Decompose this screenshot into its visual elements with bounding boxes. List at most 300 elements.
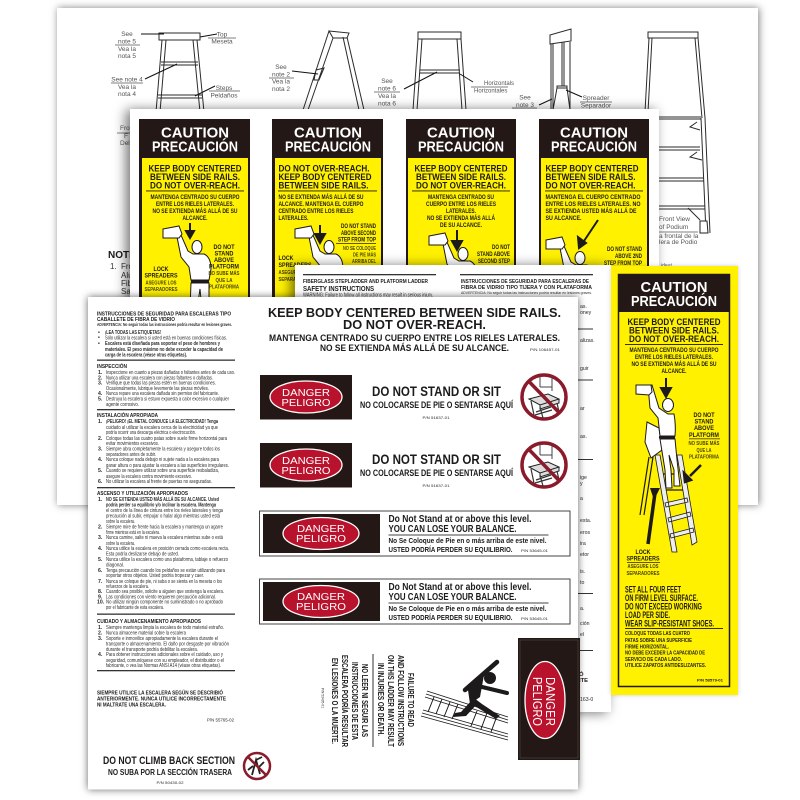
heading bar: caution precaución [618,274,730,312]
label: do not stand or sit (second): DO NOT STAND OR SIT [372,452,502,467]
text block: Spanish stepladder safety instructions: 6. [98,479,103,485]
text block: Spanish stepladder safety instructions: Nunca repare una escalera dañada sin permiso del fabricante. [106,391,219,397]
text block: right column fragments: a. [580,606,584,612]
label: caution 3 [406,119,516,316]
label: failure to read warning (rotated): ON THIS LADDER MAY RESULT [386,655,396,748]
label: caution 1: SPREADERS [144,274,178,280]
text block: set all four feet: PATAS SOBRE UNA SUPERFICIE [625,638,692,644]
label: do not stand or sit (second) [260,443,566,488]
label: caution 4: DO NOT OVER-REACH. [546,180,636,190]
panel: fiberglass ladder safety instructions sheet [295,265,611,712]
callout: lock spreaders: LOCK [636,550,651,556]
label: caution 1: ALCANCE. [182,215,208,222]
label: caution 4: CAUTION [560,124,628,142]
callout: do not stand above platform: ABOVE [694,426,714,432]
label: caution 3: LATERALES. [446,208,476,215]
label: do not stand at or above this level (second): No Se Coloque de Pie en o más arriba de este nivel. [388,604,546,613]
callout: lock spreaders: ASEGURE LOS [628,564,659,570]
text block: Spanish stepladder safety instructions: durante el transporte podría debilitar la escalera. [106,647,198,653]
label: do not stand at or above this level (second): P/N 53645-01 [521,617,548,621]
label: failure to read warning (rotated): NO LEER NI SEGUIR LAS [360,664,370,737]
diagram: side view of stepladder [269,31,364,110]
text block: Spanish stepladder safety instructions: 8. [98,589,103,595]
text block: Spanish stepladder safety instructions: Cuando se requiere utilizar sobre una superficie resbaladiza, [106,468,219,474]
text block: notes: 1. [110,262,117,271]
label: caution 2: CAUTION [294,124,362,142]
panel: large yellow caution label [611,266,738,695]
label: caution 1: SEPARADORES [144,287,178,293]
text block: Spanish stepladder safety instructions: carga de la escalera (véase otras etiquetas). [105,352,187,358]
text block: Spanish stepladder safety instructions: por el fabricante de esta escalera. [106,605,164,611]
diagram: rear view of stepladder: Horizontales [474,88,507,94]
label: do not stand at or above this level (second): YOU CAN LOSE YOUR BALANCE. [388,592,517,603]
text block: Spanish stepladder safety instructions: ganar altura o para ajustar la escalera a las superficies irregulares. [106,463,229,469]
diagram: front view of stepladder with labels [111,31,240,112]
text block: Spanish stepladder safety instructions: SIEMPRE UTILICE LA ESCALERA SEGÚN SE DESCRIBIÓ [97,688,223,696]
label: failure to read warning (rotated): EN LESIONES O LA MUERTE. [330,658,340,744]
text block: Spanish stepladder safety instructions: 3. [98,535,103,541]
text block: keep body centered: ALCANCE. [662,368,687,375]
diagram: rear view of stepladder: Vea la [378,93,396,100]
label: caution 3: DE SU ALCANCE. [440,222,482,229]
label: caution 3: DO NOT [492,245,510,251]
text block: Spanish stepladder safety instructions: 4. [98,457,103,463]
label: caution 2: SPREADERS [278,263,312,269]
text block: Spanish stepladder safety instructions: evitar movimientos excesivos. [106,441,159,447]
text block: keep body centered: BETWEEN SIDE RAILS. [629,326,719,336]
label: caution 4: MANTENGA EL CUERPO CENTRADO [546,194,641,201]
diagram: front view of stepladder with labels: See [121,31,133,38]
label: keep body centered banner: DO NOT OVER-REACH. [343,318,486,332]
text block: Spanish stepladder safety instructions: Soporte e inmovilice apropiadamente la escalera durante el [106,636,218,642]
label: caution 1: QUE LA [216,278,232,284]
label: do not stand at or above this level (second): DANGER [297,591,345,603]
text block: right column fragments: el [580,632,584,638]
label: keep body centered banner [268,306,561,354]
text block: Spanish stepladder safety instructions: Nunca almacene material sobre la escalera [106,630,186,636]
text block: set all four feet: UTILICE ZAPATOS ANTIDESLIZANTES. [625,663,706,669]
text block: Spanish stepladder safety instructions: ADVERTENCIA: No seguir todas las instrucciones podría resultar en lesiones graves. [97,322,232,327]
text block: Spanish stepladder safety instructions: 2. [98,524,103,530]
text block: set all four feet: SET ALL FOUR FEET [625,584,681,594]
label: caution 2: PRECAUCIÓN [285,138,371,156]
text block: Spanish stepladder safety instructions: 9. [98,594,103,600]
text block: Spanish stepladder safety instructions: Ocasionalmente, lubrique levemente las piezas móviles. [106,386,209,392]
label: caution 1: ENTRE LOS RIELES LATERALES. [156,201,234,208]
text block: Spanish stepladder safety instructions: 4. [98,546,103,552]
text block: set all four feet: LOAD PER SIDE. [625,610,670,620]
text block: right column fragments: Ó [579,670,584,678]
icon: no climbing back section [244,753,270,779]
label: caution 3: CUERPO ENTRE LOS RIELES [426,201,496,208]
label: caution 1: DO NOT OVER-REACH. [150,180,240,190]
label: caution 2 [272,119,383,309]
text block: Spanish stepladder safety instructions: NO SE EXTIENDA USTED MÁS ALLÁ DE SU ALCANCE. Usted [106,496,219,503]
text block: Spanish stepladder safety instructions: asegure la escalera contra movimiento excesivo. [106,474,192,480]
label: do not stand at or above this level (first): DANGER [297,523,345,535]
text block: Spanish stepladder safety instructions: podría ocurrir una descarga eléctrica o electrocución. [106,430,196,436]
diagram: side view of stepladder: nota 2 [272,86,290,93]
label: failure to read warning (rotated) [320,654,416,748]
label: danger peligro (rotated): PELIGRO [530,677,545,726]
label: do not stand at or above this level (second): Do Not Stand at or above this level. [388,582,532,593]
diagram: front view of stepladder with labels: See note 4 [111,76,143,84]
icon: person falling from ladder [421,662,508,740]
text block: Spanish stepladder safety instructions: 10. [97,600,105,606]
label: caution 2: LATERALES. [278,215,309,222]
label: do not stand at or above this level (second): USTED PODRÍA PERDER SU EQUILIBRIO. [388,613,512,622]
label: caution 2: STEP FROM TOP [338,238,376,244]
text block: Spanish stepladder safety instructions: podría perder su equilibrio y/o inclinar la escalera. Mantenga [106,502,216,508]
text block: Spanish stepladder safety instructions: sobre la escalera. [106,519,135,525]
text block: Spanish stepladder safety instructions: Nunca utilice la escalera en posición cerrada como escalera recta. [106,546,229,552]
text block: right column fragments: ar [580,406,585,412]
text block: Spanish stepladder safety instructions: refuerzos de la escalera. [106,584,149,590]
text block: Spanish instructions heading [460,274,593,295]
diagram: side view of stepladder: Vea la [272,78,290,86]
label: failure to read warning (rotated): AND FOLLOW INSTRUCTIONS [396,655,406,746]
diagram: rear view of stepladder: Horizontals [484,81,514,87]
text block: Spanish stepladder safety instructions: Verifique que todas las piezas estén en buenas condiciones. [106,380,216,386]
text block: Spanish stepladder safety instructions: Cuando sea posible, solicite a alguien que sostenga la escalera. [106,589,224,595]
diagram: rear view of stepladder [374,32,514,110]
text block: Spanish stepladder safety instructions: ¡PELIGRO! ¡EL METAL CONDUCE LA ELECTRICIDAD! Tenga [106,419,218,425]
text block: right column fragments: ige [580,475,587,481]
text block: Spanish instructions heading: FIBRA DE VIDRIO TIPO TIJERA Y CON PLATAFORMA [461,285,592,291]
text block: Spanish stepladder safety instructions: Nunca utilizar una escalera con piezas faltantes o dañadas. [106,376,213,382]
text block: Spanish stepladder safety instructions: 3. [98,636,103,642]
text block: Spanish stepladder safety instructions [97,312,235,722]
diagram: front view of stepladder with labels: Top [217,32,228,38]
label: keep body centered banner: KEEP BODY CENTERED BETWEEN SIDE RAILS. [268,306,561,320]
text block: Spanish stepladder safety instructions: 4. [98,391,103,397]
label: do not stand or sit (second): NO COLOCARSE DE PIE O SENTARSE AQUÍ [360,468,513,478]
callout: do not stand above platform: PLATAFORMA [689,454,719,460]
label: caution 1: PLATFORM [209,264,239,270]
diagram: front view of stepladder with labels: Peldaños [210,92,238,100]
label: do not climb back section: DO NOT CLIMB BACK SECTION [103,755,235,767]
text block: Spanish stepladder safety instructions: ANTERIORMENTE. NUNCA UTILICE INCORRECTAMENTE [97,696,226,702]
diagram: side view of stepladder: note 2 [272,72,290,78]
callout: lock spreaders: SEPARADORES [626,571,660,577]
text block: Spanish stepladder safety instructions: Inspeccione en cuanto a piezas dañadas o faltantes antes de cada uso. [106,370,235,376]
label: caution 1: BETWEEN SIDE RAILS. [150,172,240,182]
diagram: front view of stepladder with labels: nota 5 [118,53,136,60]
text block: Spanish stepladder safety instructions: 1. [98,419,103,425]
text block: keep body centered: MANTENGA CENTRADO SU CUERPO [630,347,719,354]
label: caution 4: DO NOT STAND [607,247,643,253]
text block: set all four feet: FIRME HORIZONTAL. [625,644,669,650]
label: keep body centered banner: NO SE EXTIENDA MÁS ALLÁ DE SU ALCANCE. [320,343,509,354]
label: caution 2: NO SE EXTIENDA MÁS ALLÁ DE SU [278,194,364,201]
text block: Spanish stepladder safety instructions: • [98,335,100,341]
label: do not stand at or above this level (first): P/N 53645-01 [521,549,548,553]
diagram: front view of stepladder with labels: Vea la [118,84,136,91]
label: caution 1: MANTENGA CENTRADO SU CUERPO [150,194,240,201]
label: do not stand at or above this level (first): No Se Coloque de Pie en o más arriba de este nivel. [388,536,546,545]
diagram: front view of stepladder with labels: nota 4 [118,91,136,98]
label: caution 1: STAND [214,252,234,258]
text block: Spanish stepladder safety instructions: diagonal. [106,562,124,568]
diagram: front view of stepladder with labels: Steps [216,85,233,92]
text block: Spanish stepladder safety instructions: cuidado al utilizar la escalera cerca de la electricidad ya que [106,425,218,431]
label: failure to read warning (rotated): ESCALERA PODRÍA RESULTAR [340,655,350,747]
label: caution 2: ARRIBA DEL [352,259,376,265]
diagram: side view of platform ladder with spreader: Separador [581,102,612,110]
text block: Spanish stepladder safety instructions: 3. [98,380,103,386]
label: caution 1: NO SUBE MÁS [208,270,240,277]
illustration: worker on stepladder [636,378,701,552]
callout: lock spreaders [626,550,660,577]
label: do not stand or sit (second): P/N 51637-01 [422,483,450,488]
label: do not stand or sit (first): P/N 51637-01 [422,415,450,420]
diagram: front view of podium ladder: of Podium [659,224,688,231]
label: caution 1: CAUTION [161,124,229,142]
text block: Spanish stepladder safety instructions: Nunca coloque nada debajo ni sujete nada a la escalera para [106,457,219,463]
text block: Spanish stepladder safety instructions: Escalera está diseñada para soportar el peso de hombres y [105,341,220,347]
label: caution 2: NO SE COLOQUE [343,246,376,252]
callout: do not stand above platform: QUE LA [696,448,712,454]
label: do not stand at or above this level (second): PELIGRO [296,601,346,613]
label: do not stand or sit (first) [260,375,566,420]
text block: Spanish stepladder safety instructions: sobre la escalera. [106,541,135,547]
label: caution 2: LOCK [278,256,294,262]
text block: Spanish stepladder safety instructions: transporte o almacenamiento. El daño por desgaste por vibración [106,642,229,648]
text block: Spanish stepladder safety instructions: Nunca camine, salte ni mueva la escalera mientras sube o está [106,535,223,541]
label: caution 1: LOCK [154,267,169,273]
diagram: side view of stepladder: See [275,64,287,71]
text block: set all four feet: NO DEBE EXCEDER LA CAPACIDAD DE [625,650,705,656]
text block: right column fragments: ira [580,541,586,547]
text block: right column fragments: as. [580,434,587,440]
label: do not stand at or above this level (first): PELIGRO [296,533,346,545]
text block: Spanish stepladder safety instructions: separadores antes de subir. [106,452,156,458]
text block: right column fragments: alizas. [580,338,595,344]
text block: Spanish stepladder safety instructions: Para obtener instrucciones adicionales sobre el cuidado, uso y [106,652,223,658]
diagram: side view of platform ladder with spreader: See [519,94,531,102]
diagram: rear view of stepladder: nota 6 [378,100,396,108]
panel: sheet of four caution labels [130,109,659,349]
text block: Spanish stepladder safety instructions: No utilizar ningún componente no suministrado o no aprobado [106,600,223,606]
text block: notes: NOTES [108,250,143,261]
label: caution 4: SE EXTIENDA USTED MÁS ALLÁ DE [546,208,636,215]
label: caution 4: ENTRE LOS RIELES LATERALES. NO [546,201,641,208]
text block: Spanish stepladder safety instructions: Las condiciones con viento requieren precaución adicional. [106,594,216,600]
text block: English instructions heading: SAFETY INSTRUCTIONS [303,286,374,293]
label: caution 1: NO SE EXTIENDA MÁS ALLÁ DE SU [152,208,238,215]
label: do not stand or sit (first): NO COLOCARSE DE PIE O SENTARSE AQUÍ [360,400,513,410]
text block: Spanish stepladder safety instructions: INSTRUCCIONES DE SEGURIDAD PARA ESCALERAS TIPO [97,312,231,318]
label: caution 1: PRECAUCIÓN [152,138,238,156]
text block: Spanish stepladder safety instructions: soportar otros objetos. Usted podría tropezar y caer. [106,573,204,579]
diagram: front view of podium ladder: ideut [661,263,672,269]
label: caution 1: DO NOT [214,245,235,251]
label: caution 4 [539,119,649,320]
text block: Spanish stepladder safety instructions: Siempre mantenga limpia la escalera de todo material extraño. [106,625,224,631]
label: do not stand or sit (second): DANGER [282,455,330,467]
text block: keep body centered: ENTRE LOS RIELES LATERALES. [635,354,713,361]
text block: keep body centered: DO NOT OVER-REACH. [629,334,719,344]
text block: Spanish stepladder safety instructions: Esta podría deslizarse debajo de usted. [106,552,179,558]
label: caution 2: BETWEEN SIDE RAILS. [278,180,368,190]
label: caution 3: DO NOT OVER-REACH. [416,180,506,190]
label: caution 2: DO NOT STAND [341,224,377,230]
text block: notes: From [121,262,140,271]
text block: Spanish stepladder safety instructions: 5. [98,468,103,474]
text block: right column fragments [578,304,595,703]
text block: set all four feet: ON FIRM LEVEL SURFACE. [625,593,698,603]
text block: Spanish stepladder safety instructions: 1. [98,370,103,376]
text block: right column fragments: to [580,580,584,586]
text block: Spanish stepladder safety instructions: 2. [98,376,103,382]
label: failure to read warning (rotated): FAILURE TO READ [406,673,416,727]
text block: Spanish stepladder safety instructions: 1. [98,497,103,503]
text block: Spanish stepladder safety instructions: 5. [98,396,103,402]
label: caution 4: ABOVE 2ND [615,254,643,260]
text block: right column fragments: y [580,481,583,487]
text block: Spanish stepladder safety instructions: firme mientras está en la escalera. [106,530,160,536]
text block: Spanish stepladder safety instructions: Destruya la escalera si estuvo expuesta a calor excesivo o cualquier [106,396,229,402]
diagram: side view of platform ladder with spreader [512,29,612,110]
text block: Spanish stepladder safety instructions: fabricante, o vea las Normas ANSI A14 (véase otras etiquetas). [106,663,221,669]
label: failure to read warning (rotated): P/N 53495-01 [320,688,326,709]
text block: Spanish instructions heading: INSTRUCCIONES DE SEGURIDAD PARA ESCALERAS DE [461,279,589,285]
callout: do not stand above platform: PLATFORM [689,433,719,439]
label: do not stand or sit (first): PELIGRO [282,397,330,409]
panel: front label sheet [88,297,580,790]
text block: notes: Alum [121,271,140,280]
text block: set all four feet: WEAR SLIP-RESISTANT SHOES. [625,618,714,628]
label: caution 3: PRECAUCIÓN [418,138,504,156]
label: caution 1: KEEP BODY CENTERED [148,164,242,174]
diagram: front view of stepladder with labels: Meseta [211,38,233,46]
diagram: front view of podium ladder: a frontal de la [659,233,699,240]
text block: Spanish stepladder safety instructions: 3. [98,446,103,452]
text block: set all four feet: SERVICIO DE CADA LADO. [625,657,682,663]
panel: ladder diagram sheet [57,8,758,505]
text block: English instructions heading: WARNING: Failure to follow all instructions may result in serious injury. [303,292,433,298]
diagram: side view of platform ladder with spreader: Spreader [583,95,610,102]
label: caution 2: ABOVE SECOND [341,231,376,237]
text block: keep body centered: KEEP BODY CENTERED [628,317,721,327]
label: do not climb back section: NO SUBA POR LA SECCIÓN TRASERA [108,768,232,777]
text block: Spanish stepladder safety instructions: Sólo utilizar la escalera si usted está en buenas condiciones físicas. [105,336,227,342]
text block: notes: Safety [121,287,144,296]
label: do not stand or sit (first): DO NOT STAND OR SIT [372,384,502,399]
text block: set all four feet: COLOQUE TODAS LAS CUATRO [625,631,690,637]
text block: notes: Fiber [121,279,140,288]
text block: Spanish stepladder safety instructions: NI MALTRATE UNA ESCALERA. [97,702,166,708]
label: caution 2: SEPARADORES [278,277,312,283]
label: caution 1: PLATAFORMA [209,284,239,290]
label: caution 1 [139,119,250,309]
text block: right column fragments: a [580,496,583,502]
text block: Spanish stepladder safety instructions: 5. [98,557,103,563]
text block: Spanish stepladder safety instructions: 2. [98,436,103,442]
text block: keep body centered: NO SE EXTIENDA MÁS ALLÁ DE SU [632,361,717,368]
label: caution 3: KEEP BODY CENTERED [414,164,508,174]
text block: Spanish stepladder safety instructions: Coloque todas las cuatro patas sobre suelo firme horizontal para [106,436,227,442]
text block: set all four feet: DO NOT EXCEED WORKING [625,602,702,612]
text block: Spanish stepladder safety instructions: materiales. El peso máximo no debe exceder la capacidad de [105,347,223,353]
text block: set all four feet: P/N 58579-01 [697,678,724,682]
label: do not stand or sit (second): PELIGRO [282,465,330,477]
diagram: front view of podium ladder [645,32,710,269]
label: caution 2: DE PIE MÁS [353,252,376,258]
text block: right column fragments: etor [580,552,589,558]
diagram: front view of podium ladder: lera de Podio [659,239,698,246]
label: caution 2: KEEP BODY CENTERED [278,172,372,182]
text block: Spanish stepladder safety instructions: el centro de la línea de cintura entre los rieles laterales y tenga [106,508,223,514]
label: caution 3: STAND ABOVE [477,252,510,258]
label: caution 4: SU ALCANCE. [546,215,582,222]
text block: right column fragments: ción [580,621,590,627]
label: do not stand at or above this level (second) [260,579,570,624]
heading bar: caution precaución: PRECAUCIÓN [631,292,717,310]
label: do not stand at or above this level (first): Do Not Stand at or above this level. [388,514,532,525]
text block: Spanish stepladder safety instructions: 1. [98,625,103,631]
text block: Spanish stepladder safety instructions: • [98,330,100,336]
text block: Spanish stepladder safety instructions: INSPECCIÓN [97,362,127,370]
text block: Spanish stepladder safety instructions: Nunca se coloque de pie, ni suba o se sienta en la meseta o los [106,579,222,585]
text block: right column fragments: guir [580,366,589,372]
text block: right column fragments: oney [580,310,592,316]
heading bar: caution precaución: CAUTION [640,279,708,296]
text block: right column fragments: eros [580,530,590,536]
text block: notes [108,125,144,296]
text block: English instructions heading [303,274,436,298]
label: caution 2: ALCANCE. MANTENGA EL CUERPO [278,201,364,208]
label: failure to read warning (rotated): INSTRUCCIONES DE ESTA [350,662,360,740]
label: caution 3: MANTENGA CENTRADO SU [428,194,494,201]
label: do not climb back section: P/N 50430-02 [156,780,184,785]
text block: right column fragments: is. [580,569,585,575]
label: danger peligro (rotated) [518,638,580,760]
label: caution 4: KEEP BODY CENTERED [546,164,639,174]
text block: Spanish stepladder safety instructions: CUIDADO Y ALMACENAMIENTO APROPIADOS [97,619,201,625]
diagram: front view of stepladder with labels: Vea la [118,46,136,53]
label: danger peligro (rotated): DANGER [543,677,558,726]
text block: Spanish stepladder safety instructions: precaución al subir, empujar o halar algo mientras usted está [106,514,220,520]
text block: notes: From [120,125,135,132]
callout: lock spreaders: SPREADERS [626,556,660,562]
label: caution 1: ASEGURE LOS [146,280,177,286]
label: do not stand or sit (first): DANGER [282,387,330,399]
diagram: side view of platform ladder with spreader: note 3 [516,102,534,109]
text block: Spanish stepladder safety instructions: 2. [98,630,103,636]
text block: Spanish stepladder safety instructions: P/N 55765-02 [207,718,235,722]
text block: Spanish stepladder safety instructions: agente corrosivo. [106,402,139,408]
text block: right column fragments: ITE [579,678,588,684]
text block: Spanish stepladder safety instructions: Siempre abra completamente la escalera y asegure todos los [106,446,220,452]
text block: keep body centered [625,317,723,375]
text block: Spanish stepladder safety instructions: ¡LEA TODAS LAS ETIQUETAS! [105,330,161,336]
text block: Spanish stepladder safety instructions: Nunca utilice la escalera como una plataforma, tablaje o refuerzo [106,557,228,563]
text block: Spanish instructions heading: ADVERTENCIA: No seguir todas las instrucciones podría resultar en lesiones graves. [461,290,592,295]
label: caution 2: CENTRADO ENTRE LOS RIELES [278,208,354,215]
label: caution 3: CAUTION [427,124,495,142]
callout: do not stand above platform: NO SUBE MÁS [688,440,720,447]
label: caution 4: STEP FROM TOP [604,261,642,267]
text block: Spanish stepladder safety instructions: ASCENSO Y UTILIZACIÓN APROPIADOS [97,489,188,497]
text block: notes: F [124,133,128,140]
text block: right column fragments: esta. [580,518,591,524]
text block: Spanish stepladder safety instructions: • [98,341,100,347]
text block: Spanish stepladder safety instructions: No utilizar la escalera al frente de puertas no aseguradas. [106,479,212,485]
text block: notes: Del [120,140,130,147]
callout: do not stand above platform: STAND [694,420,714,426]
text block: Spanish stepladder safety instructions: CABALLETE DE FIBRA DE VIDRIO [97,317,175,323]
